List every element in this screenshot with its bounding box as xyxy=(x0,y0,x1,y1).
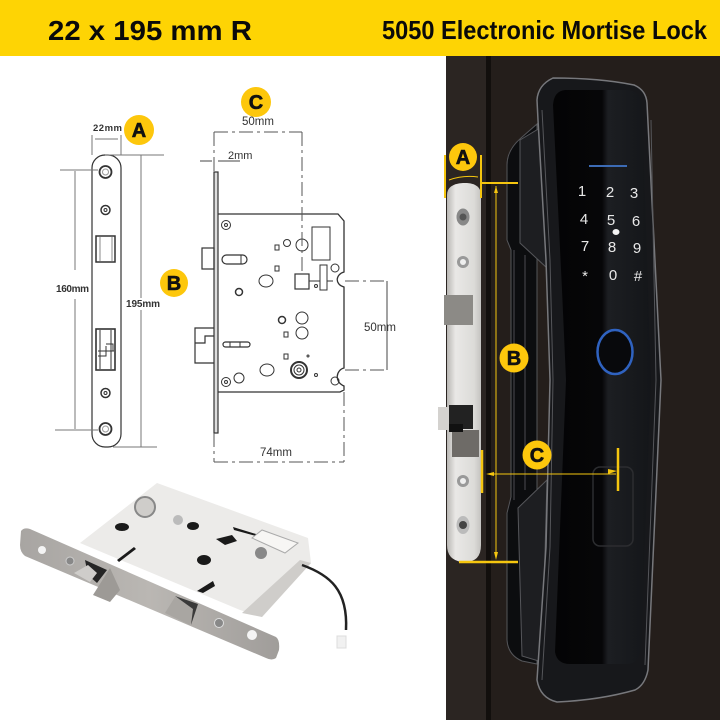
keypad: 5 xyxy=(607,212,615,229)
badge: A on door: A xyxy=(456,147,470,169)
strike faceplate xyxy=(447,183,481,562)
keypad: 0 xyxy=(609,267,617,284)
dimension overlay xyxy=(445,155,618,562)
badge: C: C xyxy=(249,92,263,114)
badge: B on door xyxy=(500,344,528,372)
badge: A: A xyxy=(132,120,146,142)
label: 50mm side: 50mm xyxy=(364,322,396,334)
mortise case outline xyxy=(218,214,344,392)
keypad: * xyxy=(582,268,588,285)
dimension lines xyxy=(214,132,388,462)
latch xyxy=(444,295,473,325)
keypad: 4 xyxy=(580,211,588,228)
door panel xyxy=(446,56,720,720)
faceplate xyxy=(20,528,279,660)
keypad: 3 xyxy=(630,185,638,202)
keypad: 7 xyxy=(581,238,589,255)
keypad: 8 xyxy=(608,239,616,256)
badge: A on door xyxy=(449,143,477,171)
dimension lines xyxy=(92,135,121,155)
badge: C on door: C xyxy=(530,445,544,467)
label: 22mm: 22mm xyxy=(93,123,122,134)
keypad: 6 xyxy=(632,213,640,230)
glass panel xyxy=(553,90,651,664)
photo: door with smart lock xyxy=(438,56,720,720)
badge: A xyxy=(124,115,154,145)
badge: C xyxy=(241,87,271,117)
header banner xyxy=(0,0,720,56)
latch and bolt xyxy=(202,248,214,269)
keypad xyxy=(578,183,643,285)
diagram: lock body side view xyxy=(195,132,388,462)
line: C xyxy=(482,448,618,493)
cable xyxy=(302,565,346,630)
arrowheads xyxy=(486,186,617,560)
label: 74mm: 74mm xyxy=(260,447,292,459)
line: B xyxy=(482,182,518,184)
lock case xyxy=(80,483,311,617)
diagram: faceplate front view xyxy=(55,135,164,447)
label: 195mm: 195mm xyxy=(126,299,160,310)
rear handle xyxy=(507,124,537,664)
badge: B on door: B xyxy=(507,348,521,370)
label: 2mm: 2mm xyxy=(228,150,252,162)
indicator bar xyxy=(589,165,627,167)
label: 50mm top: 50mm xyxy=(242,116,274,128)
badge: B xyxy=(160,269,188,297)
keypad: 1 xyxy=(578,183,586,200)
faceplate edge xyxy=(214,172,218,433)
fingerprint ring xyxy=(598,330,632,374)
front handle xyxy=(537,78,661,702)
latch bolt xyxy=(85,560,107,583)
line: A xyxy=(445,155,481,198)
photo: mortise lock xyxy=(20,483,346,660)
case holes xyxy=(312,227,330,260)
keypad: 2 xyxy=(606,184,614,201)
label: 160mm: 160mm xyxy=(56,284,89,295)
card panel xyxy=(593,467,633,546)
dead bolt xyxy=(165,597,197,625)
dead bolt xyxy=(438,407,460,430)
badge: B: B xyxy=(167,273,181,295)
case cutouts xyxy=(115,522,256,593)
badge: C on door xyxy=(522,440,552,470)
heading: size: 22 x 195 mm R xyxy=(48,15,252,46)
keypad: # xyxy=(634,268,643,285)
faceplate outline xyxy=(92,155,121,447)
keypad: 9 xyxy=(633,240,641,257)
